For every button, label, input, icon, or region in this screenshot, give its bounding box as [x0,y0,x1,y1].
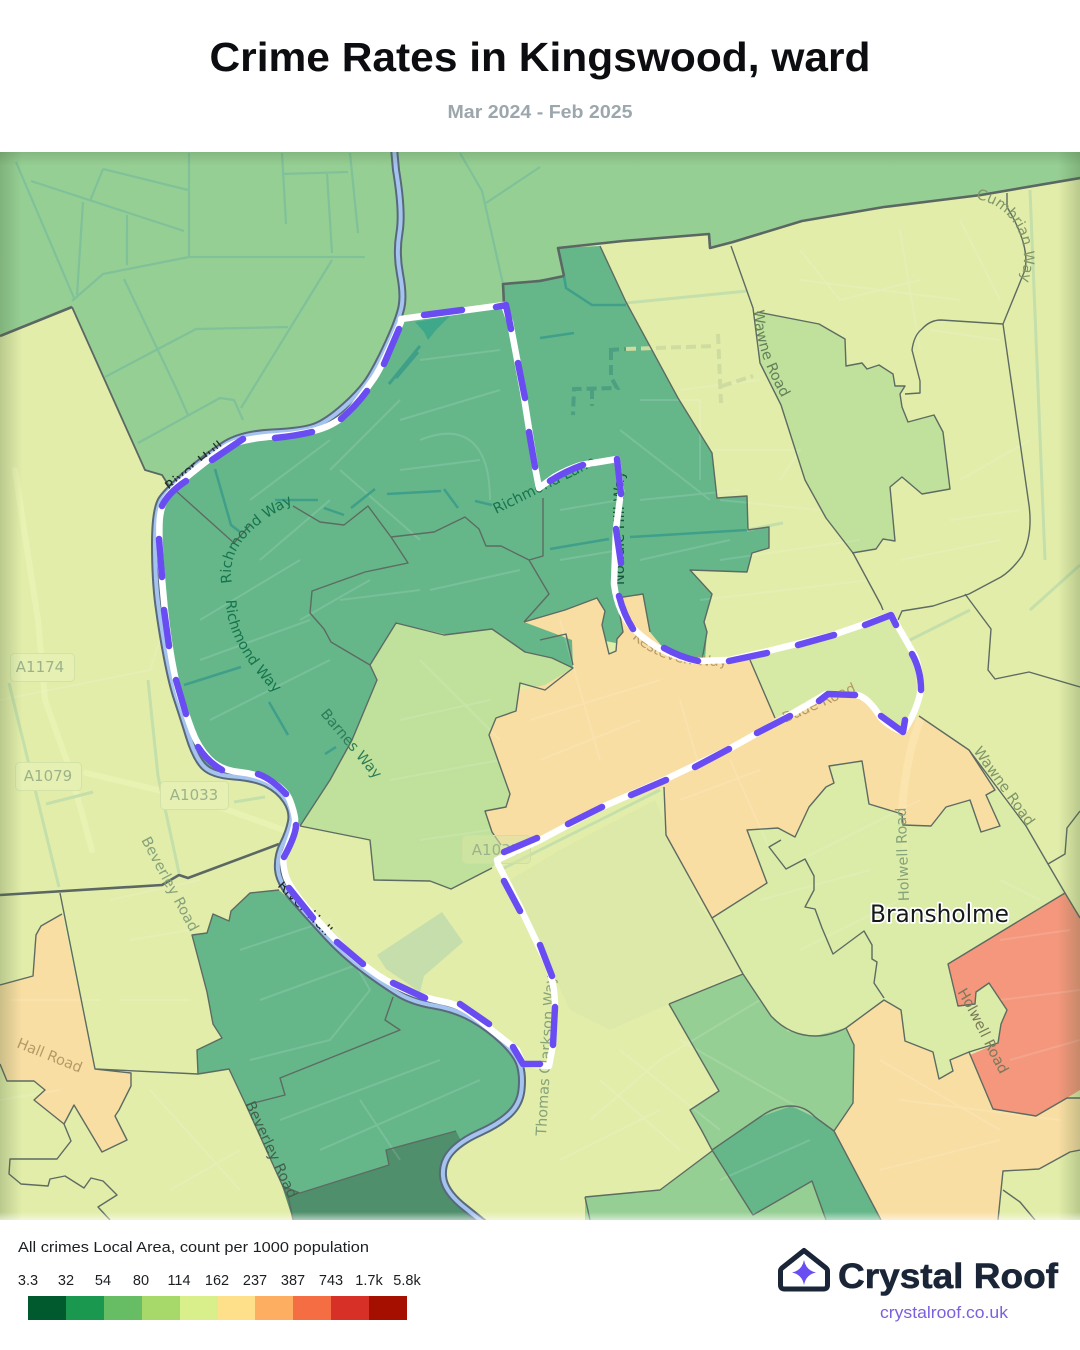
region: high-rate neighbourhood, red [948,893,1080,1116]
region: north-east neighbourhood, light green [757,312,950,553]
label: River Hull north: River Hull [164,440,222,489]
map: choropleth of crime rates [0,152,1080,1220]
region: south-east neighbourhood, orange [834,1000,1080,1220]
region: Kingswood ward low-rate area, mid green [155,246,769,826]
shield: A1033 on ward boundary [462,836,530,864]
ward boundary: Kingswood, white with purple dashes [159,305,921,1066]
road network: faint streets [0,220,1080,1190]
legend tick labels: 1.7k [355,1273,383,1289]
legend tick labels: 743 [319,1273,343,1289]
region: south-east neighbourhood, mid green [712,1106,881,1220]
label: Richmond Way north: Richmond Way [220,496,290,583]
shield: A1033 [160,782,228,810]
drains: ward waterways [184,276,747,754]
label: Beverley Road south: Beverley Road [246,1101,298,1198]
label: Hall Road: Hall Road [17,1038,83,1072]
label: Bude Road: Bude Road [782,682,856,722]
region: park strip north of Bude Road [750,615,920,730]
river: River Hull [155,148,522,1228]
ward outline: white casing [159,305,920,1066]
legend colour scale [28,1296,407,1320]
label: Thomas Clarkson Way: Thomas Clarkson Way [535,976,558,1136]
place label: Bransholme: Bransholme [870,900,1009,928]
legend tick labels: 54 [95,1273,111,1289]
region: central neighbourhood, light green [300,623,573,889]
shield: A1174: A1174 [16,658,64,676]
stream: pale water on low-rate areas [9,190,1080,887]
website: crystalroof.co.uk [880,1304,1009,1322]
legend tick labels: 5.8k [393,1273,421,1289]
map vignette: soft edges [0,152,1080,1220]
region: Bransholme west neighbourhood [712,761,1065,1079]
logo: Crystal Roof [780,1250,1058,1322]
shield: A1174 [10,654,74,682]
region: south-east neighbourhood, green [669,974,854,1150]
label: Richmond Way south: Richmond Way [226,600,281,692]
region: south-west neighbourhood, orange [0,914,131,1152]
legend tick labels: 114 [167,1273,191,1289]
label: Kesteven Way: Kesteven Way [633,636,724,669]
path: dashed footpath north of ward [573,334,753,415]
label: Barnes Way: Barnes Way [321,708,381,778]
map labels: road names [17,190,1036,1198]
label: Cumbrian Way: Cumbrian Way [978,190,1034,282]
legend tick labels: 3.3 [18,1273,38,1289]
icon: house outline with star [780,1250,828,1289]
shield: A1033: A1033 [170,786,218,804]
title: Crime Rates in Kingswood, ward [210,34,870,80]
region: southern neighbourhood, green [585,1151,826,1220]
legend tick labels: 162 [205,1273,229,1289]
legend tick labels: 387 [281,1273,305,1289]
region: darker yellow fields south of the ward [510,800,745,1030]
legend tick labels: 237 [243,1273,267,1289]
label: Richmond Lane: Richmond Lane [492,458,594,514]
pond: ward north lake [415,316,450,340]
shield: A1079: A1079 [24,767,72,785]
map base: low-rate yellow-green area [0,152,1080,1220]
park: playing field [377,912,463,992]
wordmark: Crystal Roof [838,1257,1058,1296]
road shields: A-road numbers [10,654,530,864]
field drains: northern fields [16,153,540,443]
shield: A1079 [16,762,82,790]
legend [18,1240,421,1320]
region: south-west neighbourhood, mid green [192,890,523,1220]
subtitle: date range: Mar 2024 - Feb 2025 [448,102,632,122]
label: Noddle Hill Way: Noddle Hill Way [613,474,627,584]
legend title: All crimes Local Area, count per 1000 population [18,1240,369,1256]
label: Wawne Road north: Wawne Road [754,310,791,397]
legend tick labels: 80 [133,1273,149,1289]
label: Beverley Road north: Beverley Road [142,836,200,932]
label: River Hull south: River Hull [278,881,333,936]
main roads: lighter bands [898,716,924,814]
legend tick labels: 32 [58,1273,74,1289]
region: southern neighbourhood, dark green [282,1131,479,1220]
legend tick labels [18,1273,421,1289]
neighbourhood boundaries [0,193,1080,1220]
label: Wawne Road south: Wawne Road [975,745,1036,826]
region: northern fields, green [0,152,1080,486]
shield: A1033 on ward boundary: A1033 [472,841,520,859]
ward outline: purple dashes [159,305,921,1064]
region: central neighbourhood, orange [486,594,1000,918]
label: Holwell Road north: Holwell Road [894,808,909,900]
thick district boundaries [0,178,1080,895]
label: Holwell Road south: Holwell Road [958,988,1010,1074]
